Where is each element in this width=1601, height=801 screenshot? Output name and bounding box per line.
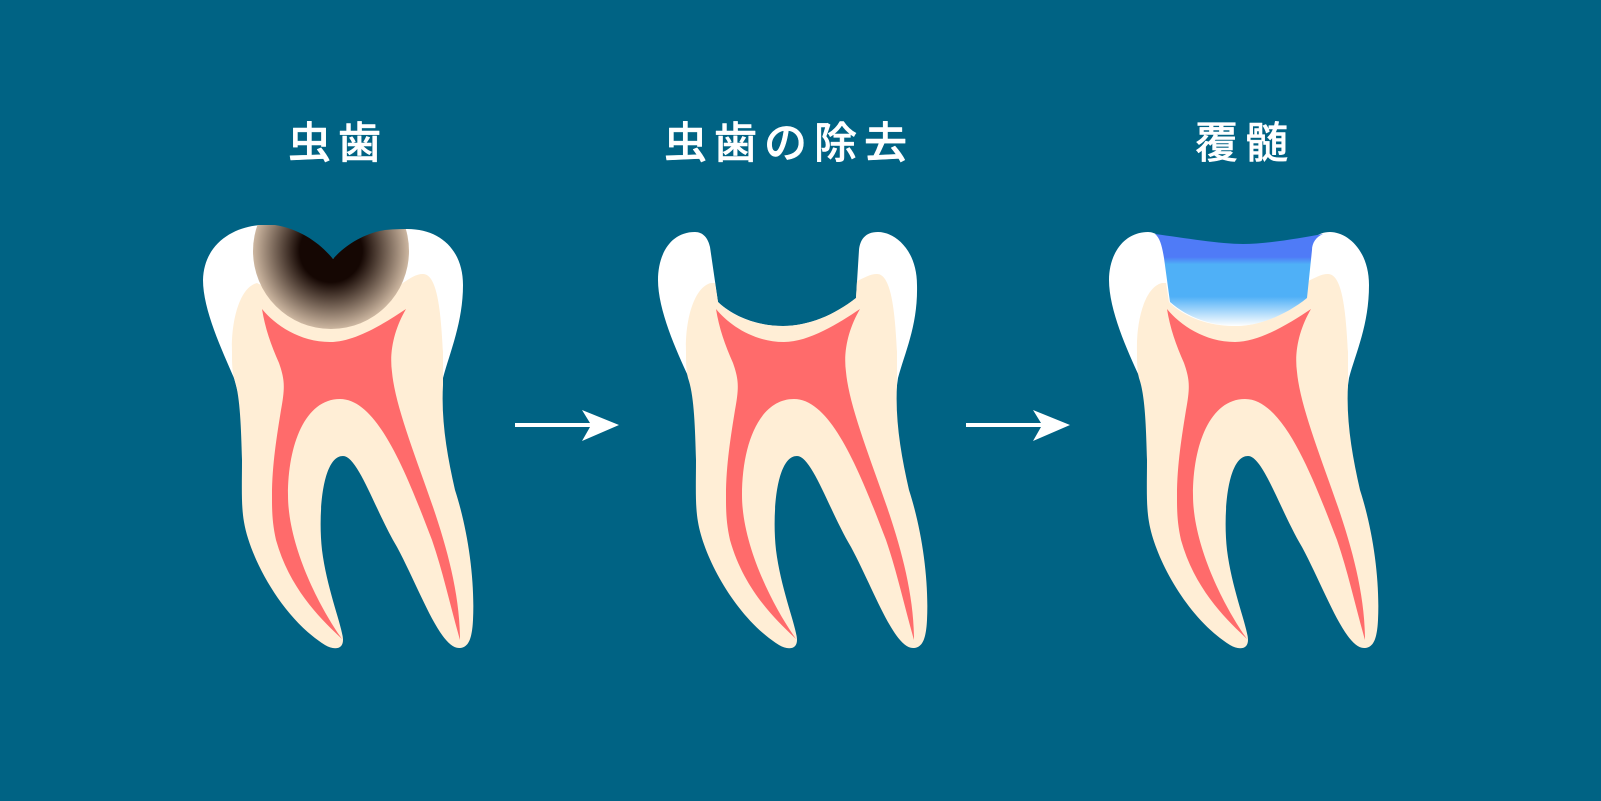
arrow 1: [515, 410, 619, 441]
dentin: [1137, 274, 1378, 648]
pulp: [716, 309, 914, 640]
decay: [253, 225, 409, 329]
title: pulp capping: 覆髄: [1195, 120, 1295, 168]
dentin: [686, 274, 927, 648]
pulp: [262, 309, 460, 640]
arrow 2: [966, 410, 1070, 441]
tooth 2: caries removed: [658, 232, 927, 648]
tooth 3: pulp capping: [1109, 232, 1378, 648]
title: caries: 虫歯: [288, 120, 388, 168]
enamel: [658, 232, 917, 400]
title: caries removal: 虫歯の除去: [664, 120, 914, 168]
tooth 1: caries: [203, 225, 474, 648]
pulp: [1167, 309, 1365, 640]
capping material: [1155, 234, 1323, 326]
enamel: [1109, 232, 1369, 400]
enamel: [203, 225, 463, 400]
dentin: [232, 274, 473, 648]
